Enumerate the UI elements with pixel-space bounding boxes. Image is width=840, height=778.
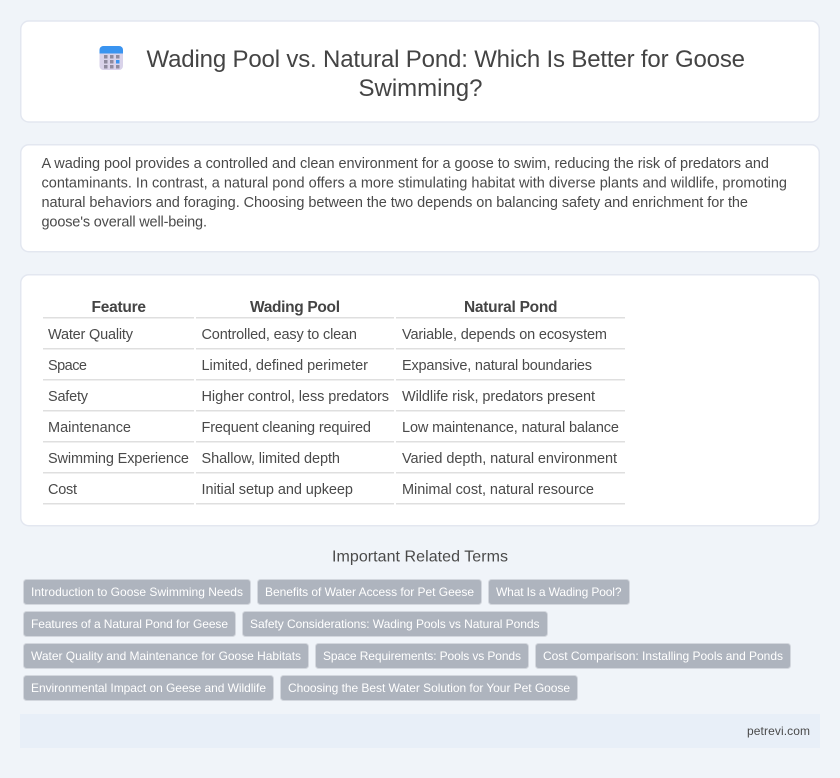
row: swimming experience: Shallow, limited depth <box>202 451 340 467</box>
text block: introduction: goose's overall well-being. <box>42 214 207 230</box>
row: swimming experience: Varied depth, natural environment <box>402 451 617 467</box>
tag <box>280 676 578 700</box>
tag: What Is a Wading Pool? <box>496 585 622 599</box>
row: cost: Initial setup and upkeep <box>202 482 353 498</box>
table header: Natural Pond <box>464 299 558 316</box>
row: cost: Cost <box>48 482 77 498</box>
tag: Environmental Impact on Geese and Wildlife <box>31 681 266 695</box>
text block: introduction: natural behaviors and foraging. Choosing between the two depends on balancing safety and enrichment for the <box>42 195 748 211</box>
row: maintenance: Low maintenance, natural balance <box>402 420 619 436</box>
text block: introduction: contaminants. In contrast, a natural pond offers a more stimulating habitat with diverse plants and wildlife, promoting <box>42 176 787 192</box>
tag: Water Quality and Maintenance for Goose Habitats <box>31 649 301 663</box>
related terms tags <box>24 580 790 700</box>
tag: Space Requirements: Pools vs Ponds <box>323 649 521 663</box>
row: safety <box>48 389 595 405</box>
row: water quality: Controlled, easy to clean <box>202 327 357 343</box>
row: safety: Safety <box>48 389 89 405</box>
text block: introduction <box>42 156 787 230</box>
footer source text: petrevi.com <box>747 724 810 738</box>
heading: related terms: Important Related Terms <box>332 548 508 566</box>
row: maintenance: Maintenance <box>48 420 131 436</box>
row: cost <box>48 482 594 498</box>
tag: Safety Considerations: Wading Pools vs Natural Ponds <box>250 617 540 631</box>
tag: Cost Comparison: Installing Pools and Ponds <box>543 649 783 663</box>
tag <box>24 612 236 636</box>
row: water quality <box>48 327 607 343</box>
title: Swimming? <box>358 75 482 102</box>
table header <box>92 299 558 316</box>
title: Wading Pool vs. Natural Pond: Which Is Better for Goose <box>146 46 745 73</box>
tag: Choosing the Best Water Solution for Your Pet Goose <box>288 681 570 695</box>
row: water quality: Variable, depends on ecosystem <box>402 327 607 343</box>
tag <box>24 676 274 700</box>
title <box>146 46 745 102</box>
table header: Wading Pool <box>250 299 340 316</box>
row: swimming experience <box>48 451 617 467</box>
tag <box>536 644 790 668</box>
row: cost: Minimal cost, natural resource <box>402 482 594 498</box>
table header: Feature <box>92 299 146 316</box>
row: safety: Higher control, less predators <box>202 389 389 405</box>
tag <box>258 580 482 604</box>
row: space: Space <box>48 358 87 374</box>
row: space <box>48 358 592 374</box>
tag: Benefits of Water Access for Pet Geese <box>265 585 474 599</box>
tag <box>316 644 528 668</box>
row: water quality: Water Quality <box>48 327 134 343</box>
icon: calendar <box>100 46 123 70</box>
row: swimming experience: Swimming Experience <box>48 451 189 467</box>
row: maintenance <box>48 420 619 436</box>
tag <box>24 580 250 604</box>
panel: header <box>21 21 819 122</box>
row: space: Expansive, natural boundaries <box>402 358 592 374</box>
tag <box>242 612 548 636</box>
row: space: Limited, defined perimeter <box>202 358 368 374</box>
table row lines <box>43 317 625 504</box>
row: maintenance: Frequent cleaning required <box>202 420 371 436</box>
panel: comparison table <box>21 275 819 526</box>
text block: introduction: A wading pool provides a controlled and clean environment for a goose to swim, reducing the risk of predators and <box>42 156 769 172</box>
tag: Features of a Natural Pond for Geese <box>31 617 228 631</box>
footer <box>20 714 820 748</box>
row: safety: Wildlife risk, predators present <box>402 389 595 405</box>
panel: introduction <box>21 145 819 252</box>
tag: Introduction to Goose Swimming Needs <box>31 585 243 599</box>
tag <box>488 580 630 604</box>
tag <box>24 644 308 668</box>
